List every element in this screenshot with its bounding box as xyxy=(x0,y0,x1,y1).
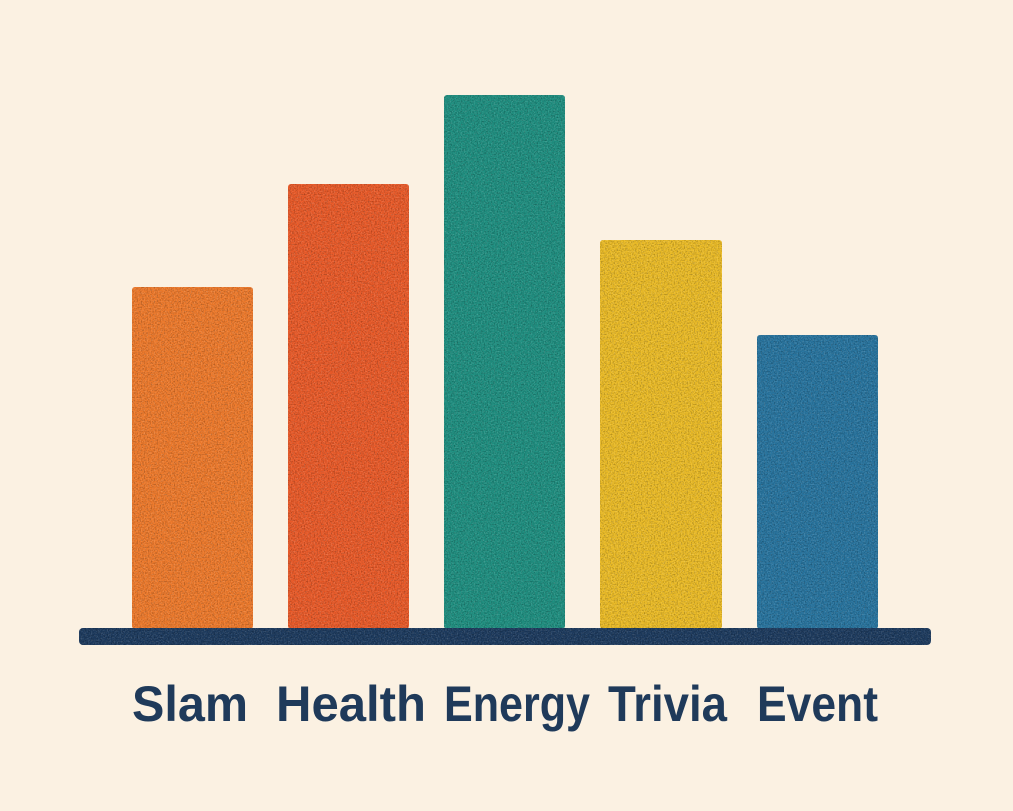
label: Event: Event xyxy=(757,676,878,732)
bar: Energy xyxy=(444,95,565,629)
label: Slam: Slam xyxy=(132,676,248,732)
label: Trivia: Trivia xyxy=(608,676,728,732)
label: Energy: Energy xyxy=(444,676,590,732)
bar: Slam xyxy=(132,287,253,629)
label: Health: Health xyxy=(276,676,426,732)
bar: Trivia xyxy=(600,240,722,629)
bar: Event xyxy=(757,335,878,629)
bar: Health xyxy=(288,184,409,629)
chart baseline xyxy=(79,628,931,645)
category labels xyxy=(132,676,878,732)
